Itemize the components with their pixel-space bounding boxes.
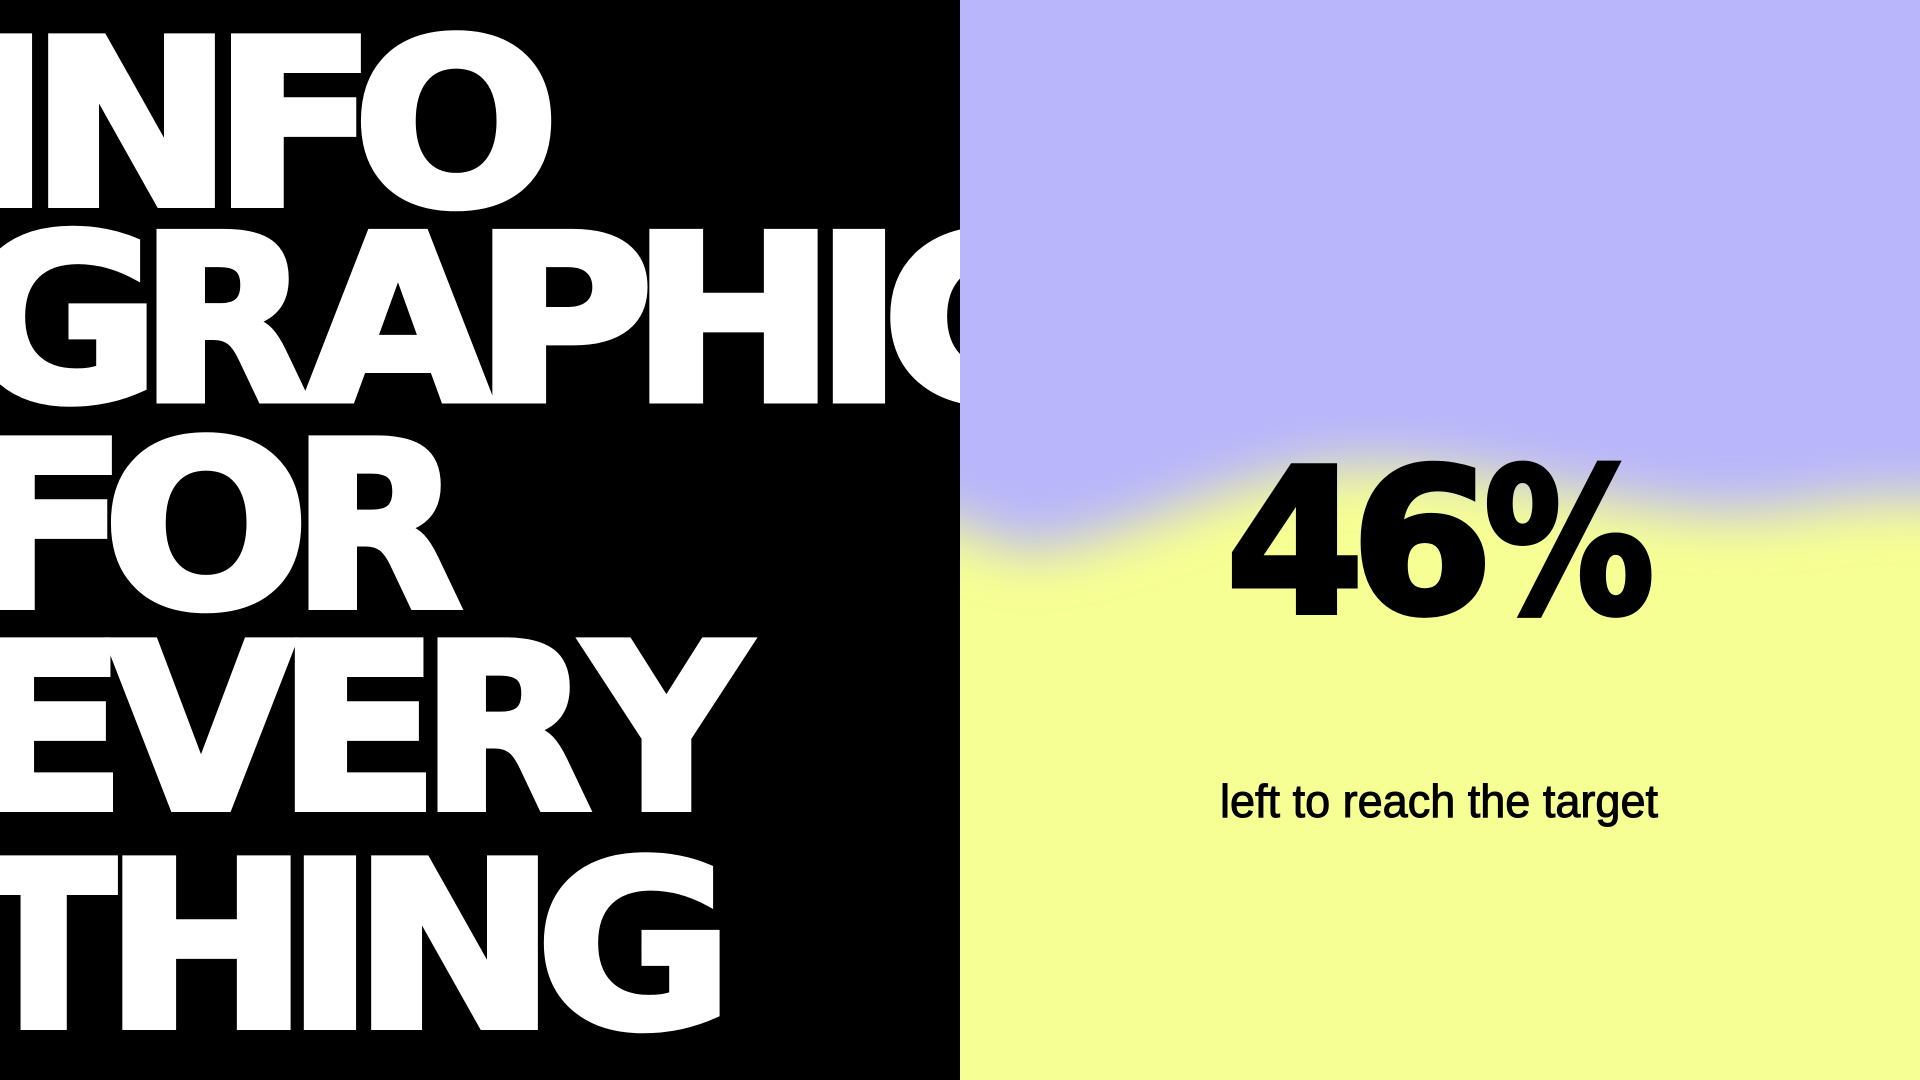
stat: 46%: 4: [1226, 426, 1364, 659]
stat: 46%: 6: [1351, 426, 1493, 660]
title line: GRAPHIC: I: [814, 187, 904, 455]
title line: EVERY: R: [420, 596, 591, 863]
title line: GRAPHIC: C: [882, 188, 1067, 455]
title line: INFO: [0, 30, 552, 212]
title line: GRAPHIC: A: [304, 186, 491, 455]
title line: THING: [0, 852, 720, 1034]
title line: GRAPHIC: R: [140, 187, 310, 455]
caption: left to reach the target: left to reach the target: [1220, 775, 1658, 827]
title line: FOR: O: [102, 393, 310, 661]
panel: gradient background: [860, 0, 1920, 1080]
title line: EVERY: Y: [581, 595, 751, 863]
panel: black title panel: [0, 0, 960, 1080]
title line: FOR: R: [292, 394, 462, 661]
title line: EVERY: [0, 637, 758, 812]
title line: EVERY: E: [276, 596, 440, 863]
title line: THING: G: [536, 813, 734, 1080]
stat: 46%: %: [1484, 427, 1654, 659]
title line: GRAPHIC: P: [474, 188, 654, 455]
title line: GRAPHIC: H: [630, 188, 836, 455]
title line: THING: N: [352, 813, 557, 1080]
title: INFOGRAPHIC FOR EVERYTHING: [0, 30, 960, 1034]
title line: THING: H: [104, 814, 309, 1080]
title line: THING: I: [286, 814, 375, 1080]
title line: GRAPHIC: [0, 226, 960, 407]
title line: FOR: [0, 432, 464, 614]
title line: EVERY: V: [108, 595, 294, 863]
stat: 46%: [1226, 426, 1654, 660]
